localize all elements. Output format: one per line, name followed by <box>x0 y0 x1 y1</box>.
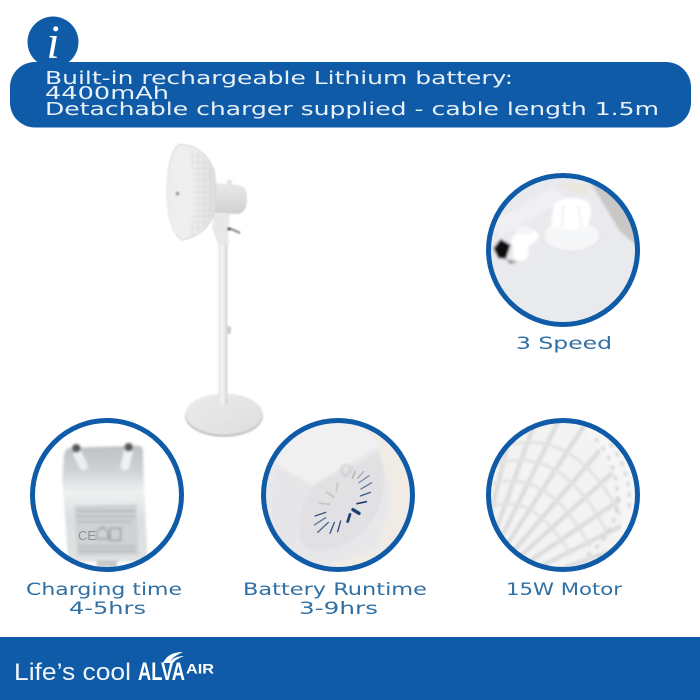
motor grille photo <box>491 423 635 567</box>
motor housing <box>212 180 247 245</box>
feature: battery runtime <box>243 420 427 619</box>
3 speed ring <box>488 176 638 324</box>
battery runtime label <box>243 580 427 619</box>
info icon <box>28 16 78 69</box>
info banner: Built-in rechargeable Lithium battery: <box>45 69 513 89</box>
brand logo <box>138 652 214 686</box>
fan photo <box>167 144 263 437</box>
charger photo <box>62 441 148 567</box>
3 speed photo <box>491 178 635 322</box>
fan pole <box>216 235 231 418</box>
info banner: Detachable charger supplied - cable length 1.5m <box>45 100 659 120</box>
fan guard <box>167 144 216 240</box>
tagline: Life’s cool <box>14 659 131 686</box>
battery photo <box>263 420 415 572</box>
charger ring <box>32 420 182 570</box>
brand logo: AIR <box>186 660 214 676</box>
charging time label: 4-5hrs <box>69 599 146 619</box>
feature: 15W motor <box>486 418 640 595</box>
brand logo: ALVA <box>138 658 185 686</box>
battery runtime label: 3-9hrs <box>299 599 378 619</box>
motor ring <box>488 420 638 570</box>
fan base <box>185 394 263 437</box>
charging time label <box>26 580 182 619</box>
info banner <box>10 62 691 128</box>
charger CE mark: CE <box>78 528 96 543</box>
feature: 3 speed <box>487 173 640 354</box>
info icon: i <box>46 16 60 69</box>
charging time label: Charging time <box>26 580 182 600</box>
battery ring <box>264 420 412 570</box>
battery runtime label: Battery Runtime <box>243 580 427 600</box>
3 speed label: 3 Speed <box>516 334 612 354</box>
info banner: 4400mAh <box>45 84 169 104</box>
footer band <box>0 637 700 700</box>
feature: charging time <box>26 420 183 619</box>
15W motor label: 15W Motor <box>506 580 622 600</box>
